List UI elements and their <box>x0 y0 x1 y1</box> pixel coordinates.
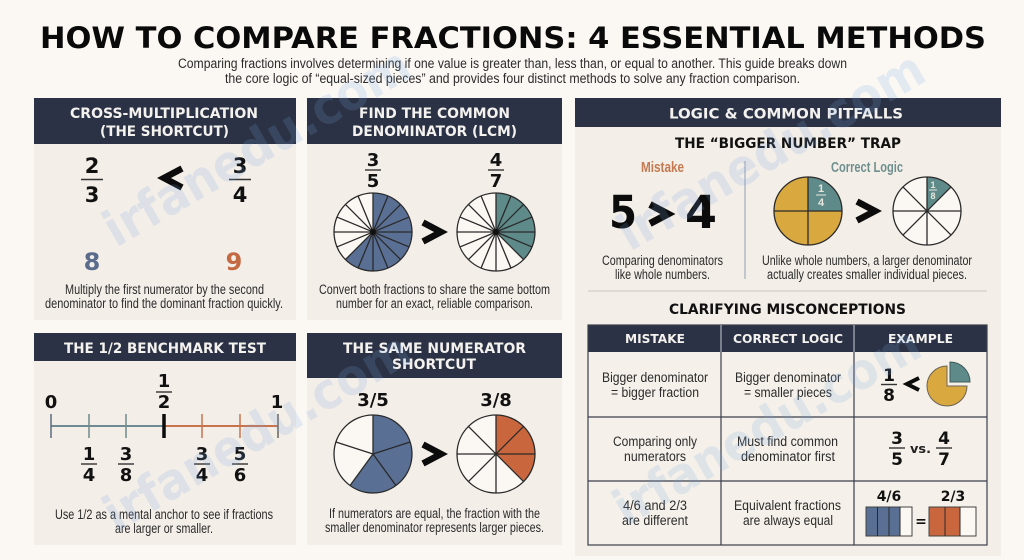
row 2 correct logic: denominator first <box>741 449 835 464</box>
pie: one quarter <box>774 177 842 245</box>
pie: 4/7 in teal <box>457 193 535 271</box>
big comparison 5 > 4 <box>609 186 717 239</box>
panel heading: cross-multiplication: (THE SHORTCUT) <box>100 124 229 140</box>
correct logic description: actually creates smaller individual pieces. <box>767 267 967 282</box>
watermark <box>93 36 935 543</box>
pie: 3/5 in blue <box>334 415 412 493</box>
intro text: the core logic of “equal-sized pieces” and provides four distinct methods to solve any fraction comparison. <box>225 71 800 86</box>
fraction 3/5: 3 <box>367 150 379 171</box>
table header row: CORRECT LOGIC <box>733 332 843 346</box>
row 2 example: 3/5 vs 4/7: 3 <box>891 429 903 449</box>
label 5/6: 5 <box>234 444 246 465</box>
fraction 2/3: 3 <box>85 183 99 207</box>
panel: benchmark test <box>34 333 296 545</box>
heading: bigger number trap: THE “BIGGER NUMBER” TRAP <box>675 136 901 152</box>
description: If numerators are equal, the fraction with the <box>329 506 540 521</box>
product 8: 8 <box>84 248 100 276</box>
row 2 example: 3/5 vs 4/7: 5 <box>891 450 903 470</box>
row 2 example: 3/5 vs 4/7: 7 <box>938 450 950 470</box>
table header row: MISTAKE <box>625 332 685 346</box>
mistake description: Comparing denominators <box>602 253 723 268</box>
description: Use 1/2 as a mental anchor to see if fractions <box>55 507 273 522</box>
panel heading: same numerator: SHORTCUT <box>392 357 476 373</box>
table header row <box>588 325 987 352</box>
row 2 correct logic: Must find common <box>737 434 838 449</box>
label 1: 1 <box>271 392 283 413</box>
row 1 example: 1/8 less than pie: 8 <box>883 386 895 406</box>
row 2 mistake <box>613 434 697 464</box>
row 3 mistake: are different <box>622 513 688 528</box>
greater-than sign <box>423 222 441 242</box>
label 3/4 <box>194 444 210 486</box>
number line <box>51 414 278 438</box>
less-than sign <box>164 168 182 188</box>
row 1 correct logic <box>735 370 841 400</box>
mistake description <box>602 253 723 282</box>
label 5/6 <box>232 444 248 486</box>
label 1/2: 1 <box>158 371 170 392</box>
pie: one quarter: 1 <box>818 183 824 195</box>
row 1 example: 1/8 less than pie: 1 <box>883 366 895 386</box>
watermark: irfanedu.com <box>607 40 935 262</box>
label 3/8: 3/8 <box>480 390 512 411</box>
panel heading: logic and pitfalls: LOGIC & COMMON PITFALLS <box>669 106 903 122</box>
panel heading: benchmark test <box>34 333 296 361</box>
heading: clarifying misconceptions: CLARIFYING MISCONCEPTIONS <box>669 302 906 318</box>
pie: 3/5 in blue <box>334 193 412 271</box>
fraction 2/3: 2 <box>85 154 99 178</box>
panel heading: common denominator: DENOMINATOR (LCM) <box>352 124 517 140</box>
row 1 mistake: = bigger fraction <box>611 385 699 400</box>
description: smaller denominator represents larger pieces. <box>325 520 544 535</box>
description: Multiply the first numerator by the second <box>65 282 264 297</box>
label: correct logic: Correct Logic <box>831 160 903 176</box>
row 1 example: 1/8 less than pie <box>881 362 970 406</box>
watermark: irfanedu.com <box>93 321 421 543</box>
label 3/8: 8 <box>120 465 132 486</box>
fraction 3/5 <box>365 150 381 192</box>
row 2 mistake: Comparing only <box>613 434 697 449</box>
table header row: EXAMPLE <box>888 332 953 346</box>
row 3 correct logic <box>734 498 841 528</box>
row 2 mistake: numerators <box>624 449 686 464</box>
description <box>45 282 283 311</box>
description: number for an exact, reliable comparison. <box>336 296 533 311</box>
description <box>325 506 544 535</box>
label: mistake: Mistake <box>641 160 684 176</box>
pie: 3/8 in orange <box>457 415 535 493</box>
label 0: 0 <box>45 392 57 413</box>
description: denominator to find the dominant fraction quickly. <box>45 296 283 311</box>
panel: common denominator <box>307 98 562 320</box>
label 1/2 <box>156 371 172 413</box>
table: misconceptions <box>588 325 987 545</box>
label 3/8: 3 <box>120 444 132 465</box>
pie: one eighth: 1 <box>930 180 936 190</box>
description: Convert both fractions to share the same bottom <box>319 282 550 297</box>
big comparison 5 > 4: 5 <box>609 186 637 239</box>
big comparison 5 > 4: 4 <box>685 186 717 239</box>
panel: same numerator <box>307 333 562 545</box>
row 2 example: 3/5 vs 4/7: 4 <box>938 429 950 449</box>
vertical divider <box>744 161 746 279</box>
row 1 mistake: Bigger denominator <box>602 370 708 385</box>
row 3 example: fraction bars: 4/6 <box>877 489 901 505</box>
fraction 4/7: 7 <box>490 171 502 192</box>
label 1/4 <box>81 444 97 486</box>
label 3/8 <box>118 444 134 486</box>
row 3 example: fraction bars <box>866 489 976 536</box>
description <box>319 282 550 311</box>
row 2 example: 3/5 vs 4/7: vs. <box>910 442 931 456</box>
label 3/5: 3/5 <box>357 390 389 411</box>
title: HOW TO COMPARE FRACTIONS: 4 ESSENTIAL METHODS <box>40 21 986 55</box>
fraction 4/7 <box>488 150 504 192</box>
row 1 mistake <box>602 370 708 400</box>
label 1/4: 1 <box>83 444 95 465</box>
row 3 mistake: 4/6 and 2/3 <box>623 498 687 513</box>
panel: logic and common pitfalls <box>575 98 1001 556</box>
fraction 3/5: 5 <box>367 171 379 192</box>
panel heading: cross-multiplication: CROSS-MULTIPLICATION <box>70 106 258 122</box>
watermark: irfanedu.com <box>603 315 931 537</box>
watermark: irfanedu.com <box>93 36 421 258</box>
pie: one quarter: 4 <box>818 197 825 209</box>
fraction 3/4: 4 <box>233 183 247 207</box>
label 5/6: 6 <box>234 465 246 486</box>
correct logic description: Unlike whole numbers, a larger denominator <box>762 253 972 268</box>
greater-than sign <box>857 202 875 220</box>
mistake description: like whole numbers. <box>615 267 710 282</box>
fraction 3/4 <box>229 154 251 207</box>
label 1/4: 4 <box>83 465 95 486</box>
fraction 2/3 <box>81 154 103 207</box>
correct logic description <box>762 253 972 282</box>
panel heading: cross-multiplication <box>34 98 296 144</box>
row 1 correct logic: Bigger denominator <box>735 370 841 385</box>
panel heading: common denominator <box>307 98 562 144</box>
row 2 example: 3/5 vs 4/7 <box>889 429 952 470</box>
row 3 correct logic: Equivalent fractions <box>734 498 841 513</box>
intro text: Comparing fractions involves determining if one value is greater than, less than, or equal to another. This guide breaks down <box>178 56 847 71</box>
fraction 4/7: 4 <box>490 150 502 171</box>
row 2 correct logic <box>737 434 838 464</box>
fraction 3/4: 3 <box>233 154 247 178</box>
row 3 example: fraction bars: 2/3 <box>941 489 965 505</box>
label 1/2: 2 <box>158 392 170 413</box>
panel heading: logic and pitfalls <box>575 98 1001 127</box>
row 3 example: fraction bars: = <box>915 514 927 530</box>
panel heading: benchmark test: THE 1/2 BENCHMARK TEST <box>64 341 266 357</box>
panel: cross-multiplication <box>34 98 296 320</box>
intro text <box>178 56 847 86</box>
description <box>55 507 273 536</box>
pie: one eighth: 8 <box>930 191 936 201</box>
greater-than sign <box>423 444 441 464</box>
row 3 mistake <box>622 498 688 528</box>
row 3 correct logic: are always equal <box>743 513 833 528</box>
product 9: 9 <box>226 248 242 276</box>
panel heading: common denominator: FIND THE COMMON <box>359 106 510 122</box>
panel heading: same numerator <box>307 333 562 378</box>
row 1 correct logic: = smaller pieces <box>744 385 832 400</box>
panel heading: same numerator: THE SAME NUMERATOR <box>343 341 526 357</box>
description: are larger or smaller. <box>115 521 213 536</box>
label 3/4: 4 <box>196 465 208 486</box>
pie: one eighth <box>893 177 961 245</box>
label 3/4: 3 <box>196 444 208 465</box>
